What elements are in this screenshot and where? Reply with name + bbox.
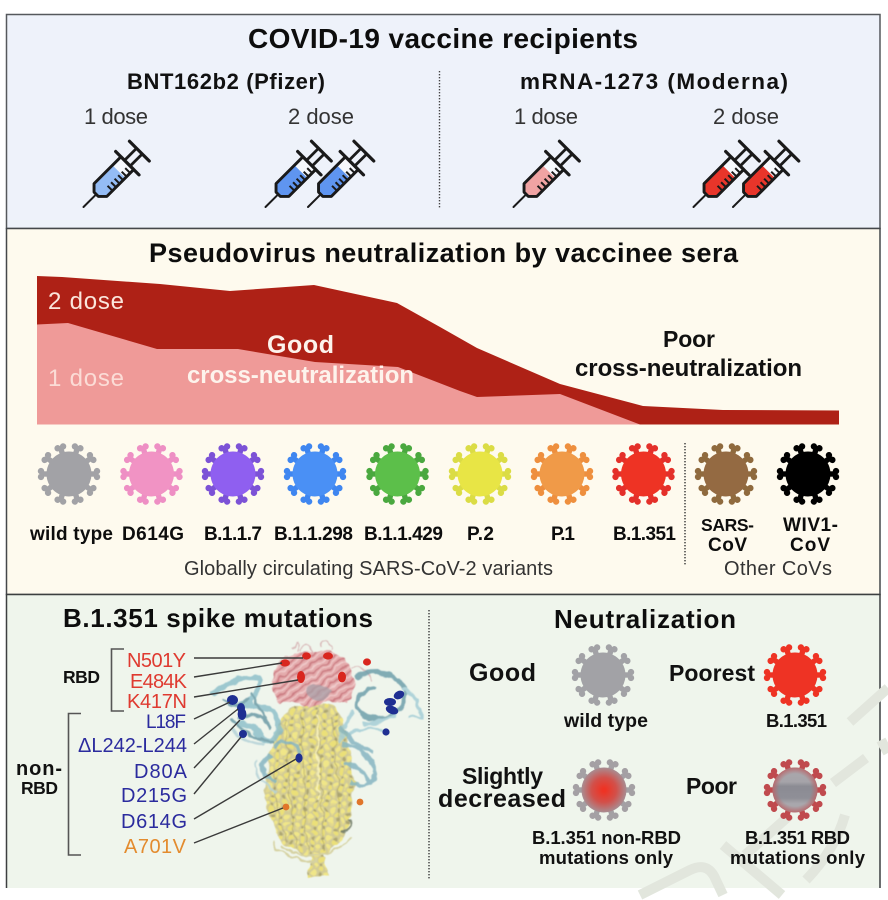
variant labels: B.1.1.429 [364, 524, 443, 545]
label: B.1.351 RBD mutations only: mutations only [730, 847, 866, 868]
icon: virus WIV1-CoV [768, 435, 848, 513]
label: Moderna 2 dose: 2 dose [713, 104, 779, 129]
watermark [640, 688, 888, 895]
icon: virus P.2 [440, 435, 520, 513]
label: Poor: Poor [686, 773, 737, 799]
spike protein: pink RBD crown [271, 650, 354, 706]
variant labels: P.1 [551, 524, 575, 545]
icon: wild type virus [563, 636, 643, 714]
panel: spike mutations and neutralization [6, 594, 888, 895]
icon: Pfizer syringe, 1 dose [72, 139, 151, 219]
label: B.1.351: B.1.351 [766, 710, 827, 731]
non-RBD mutation labels: D215G [121, 785, 187, 807]
variant labels: SARS- [701, 515, 754, 535]
variant labels: P.2 [467, 524, 494, 545]
label: Slightly decreased: decreased [438, 785, 566, 813]
variant labels: B.1.1.7 [204, 524, 262, 545]
RBD mutation labels: E484K [130, 671, 188, 693]
label: RBD: RBD [63, 667, 100, 687]
non-RBD mutation labels: L18F [146, 712, 186, 733]
label: 2 dose: 2 dose [48, 288, 124, 315]
variant labels: B.1.1.298 [274, 524, 353, 545]
label: wild type: wild type [563, 710, 648, 732]
RBD bracket [112, 649, 124, 711]
icon: virus D614G [112, 435, 191, 513]
label: Good cross-neutralization: Good [267, 331, 334, 359]
label: A701V: A701V [124, 836, 187, 858]
non-RBD mutation labels [78, 712, 188, 833]
subheading: mRNA-1273 (Moderna): mRNA-1273 (Moderna) [520, 69, 788, 94]
label: Poor cross-neutralization [575, 326, 802, 382]
non-RBD mutation labels: D80A [134, 761, 188, 783]
RBD mutation labels: K417N [127, 691, 187, 713]
mutation sites: blue [227, 689, 406, 763]
label: B.1.351 non-RBD mutations only [532, 827, 681, 868]
label: non-RBD: RBD [21, 778, 58, 798]
icon: virus B.1.1.7 [193, 435, 273, 513]
icon: virus P.1 [522, 435, 602, 513]
label: B.1.351 non-RBD mutations only: mutations only [539, 847, 674, 868]
area: 2 dose [37, 276, 839, 424]
variant labels [29, 515, 838, 556]
label: Good cross-neutralization: cross-neutralization [187, 362, 414, 389]
label: non-RBD [16, 758, 62, 798]
spike protein: yellow stalk [265, 704, 355, 878]
heading: Pseudovirus neutralization by vaccinee sera: Pseudovirus neutralization by vaccinee sera [149, 238, 739, 268]
subheading: BNT162b2 (Pfizer): BNT162b2 (Pfizer) [127, 69, 325, 94]
variant labels: WIV1- [783, 515, 838, 536]
variant labels: D614G [122, 524, 184, 545]
icon: virus wild type [29, 435, 109, 513]
variant labels: CoV [790, 535, 830, 556]
mutation sites: orange [283, 799, 363, 810]
heading: B.1.351 spike mutations: B.1.351 spike mutations [63, 603, 373, 633]
label: Poor cross-neutralization: cross-neutralization [575, 355, 802, 382]
icon: virus B.1.1.298 [275, 435, 355, 513]
mutation sites: red [280, 652, 371, 683]
heading: Neutralization: Neutralization [554, 604, 736, 634]
label: Good: Good [469, 659, 536, 687]
panel: Pseudovirus neutralization by vaccinee sera [6, 228, 880, 594]
label: B.1.351 RBD mutations only: B.1.351 RBD [745, 827, 850, 848]
RBD mutation labels [127, 650, 188, 713]
label: non-RBD: non- [16, 758, 62, 780]
label: Poor cross-neutralization: Poor [663, 326, 715, 352]
label: Good cross-neutralization [187, 331, 414, 389]
area chart: neutralization by dose [37, 276, 839, 424]
icon: RBD mutations virus [755, 751, 835, 829]
variant labels: CoV [708, 535, 747, 556]
icon: B.1.351 virus [755, 636, 835, 714]
non-RBD mutation labels: ΔL242-L244 [78, 735, 187, 757]
label: Moderna 1 dose: 1 dose [514, 104, 578, 129]
RBD mutation labels: N501Y [127, 650, 186, 672]
icon: Pfizer syringes, 2 dose [254, 139, 376, 219]
label: 1 dose: 1 dose [48, 365, 124, 392]
variant labels: B.1.351 [613, 524, 676, 545]
label: Slightly decreased [438, 763, 566, 813]
heading: COVID-19 vaccine recipients: COVID-19 vaccine recipients [248, 23, 638, 54]
label: Pfizer 2 dose: 2 dose [288, 104, 354, 129]
icon: Moderna syringe, 1 dose [502, 139, 581, 219]
icon: virus B.1.1.429 [358, 435, 437, 513]
panel: COVID-19 vaccine recipients [6, 14, 880, 228]
non-RBD bracket [68, 714, 81, 855]
spike protein: teal domains [214, 673, 422, 832]
label: Pfizer 1 dose: 1 dose [84, 104, 148, 129]
caption: Other CoVs: Other CoVs [724, 558, 832, 580]
icon: virus B.1.351 [604, 435, 683, 513]
icon: Moderna syringes, 2 dose [682, 139, 801, 219]
caption: Globally circulating SARS-CoV-2 variants: Globally circulating SARS-CoV-2 variants [184, 558, 553, 580]
leader lines [194, 658, 303, 843]
variant labels: wild type [29, 524, 113, 545]
icon: virus SARS-CoV [686, 435, 766, 513]
icon: non-RBD mutations virus [564, 751, 644, 829]
label: Slightly decreased: Slightly [462, 763, 543, 789]
non-RBD mutation labels: D614G [121, 811, 187, 833]
label: B.1.351 RBD mutations only [730, 827, 866, 868]
label: B.1.351 non-RBD mutations only: B.1.351 non-RBD [532, 827, 681, 848]
label: Poorest: Poorest [669, 660, 755, 686]
illustration: spike protein structure [214, 641, 422, 878]
area: 1 dose [37, 323, 640, 424]
